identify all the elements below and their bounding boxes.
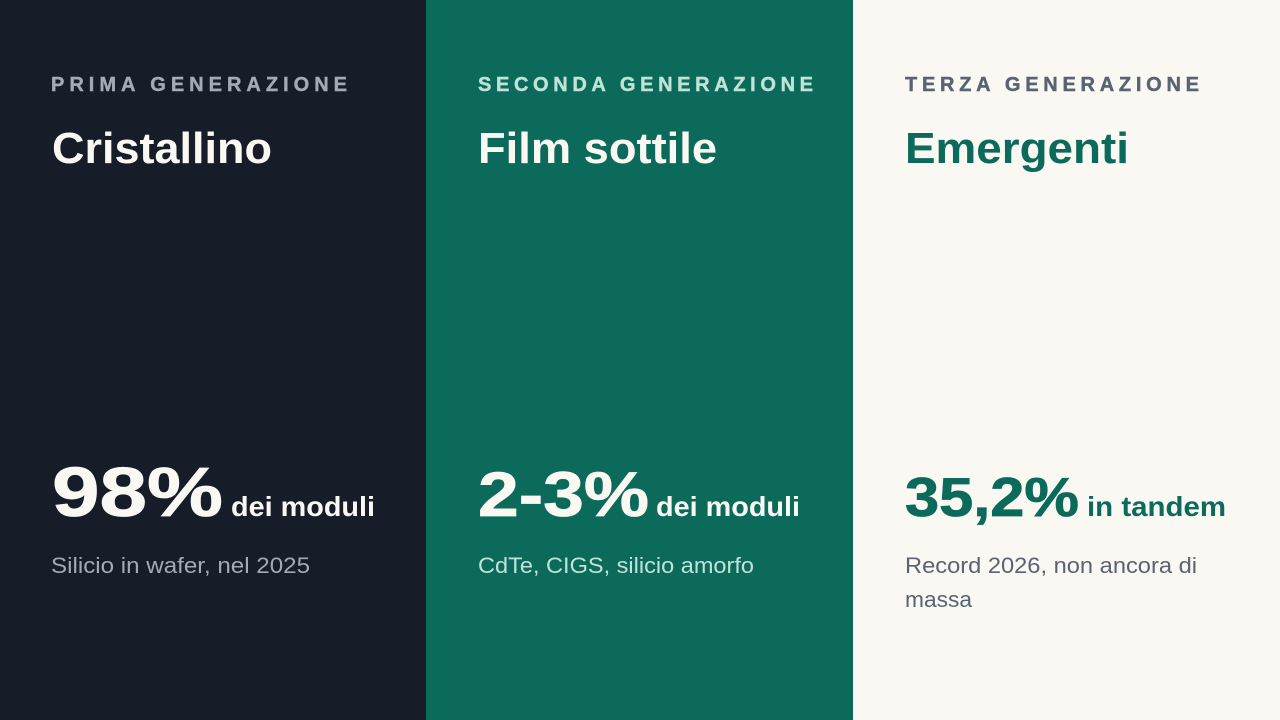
stat: 98% dei moduli: dei moduli [231,491,375,522]
stat: 98% dei moduli: 98% [52,453,223,531]
panel: seconda generazione [426,0,853,720]
eyebrow: terza generazione: TERZA GENERAZIONE [905,74,1199,96]
note: record 2026: massa [905,587,973,612]
eyebrow: seconda generazione: SECONDA GENERAZIONE [478,74,813,96]
stat: 2-3% dei moduli [478,460,800,530]
stat: 35,2% in tandem: in tandem [1087,491,1226,522]
note: record 2026 [905,553,1197,612]
panel: terza generazione [853,0,1280,720]
stat: 2-3% dei moduli: dei moduli [656,491,800,522]
panel: prima generazione [0,0,426,720]
stat: 2-3% dei moduli: 2-3% [478,460,649,530]
eyebrow: prima generazione: PRIMA GENERAZIONE [51,74,347,96]
note: record 2026: Record 2026, non ancora di [905,553,1197,578]
stat: 35,2% in tandem [905,466,1226,528]
heading: film sottile: Film sottile [478,124,717,173]
note: cdte, cigs: CdTe, CIGS, silicio amorfo [478,553,754,578]
note: silicio in wafer: Silicio in wafer, nel 2025 [51,553,310,578]
stat: 35,2% in tandem: 35,2% [905,466,1079,528]
stat: 98% dei moduli [52,453,375,531]
heading: cristallino: Cristallino [52,124,272,173]
heading: emergenti: Emergenti [905,124,1129,173]
